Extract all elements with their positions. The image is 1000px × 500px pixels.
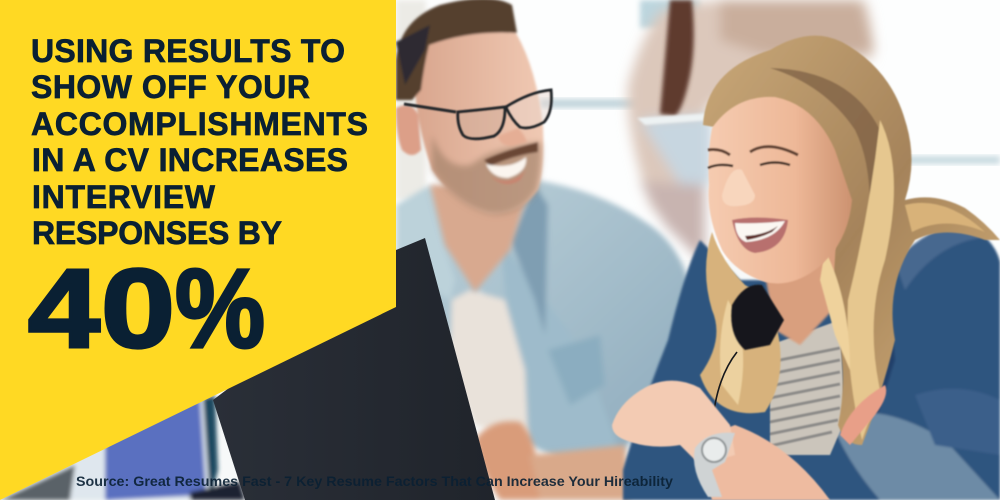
source line: Source: Great Resumes Fast - 7 Key Resume Factors That Can Increase Your Hireability (76, 473, 673, 489)
photo: woman with headset (612, 36, 1000, 500)
yellow panel (0, 0, 396, 500)
woman's face (708, 97, 852, 284)
big statistic: 40%: 4 (28, 246, 100, 371)
headline: SHOW OFF YOUR (31, 69, 310, 105)
headline: USING RESULTS TO (31, 33, 345, 69)
headline: ACCOMPLISHMENTS (31, 106, 368, 142)
man's glasses (404, 90, 551, 139)
big statistic: 40%: % (175, 246, 265, 371)
woman's denim jacket (623, 222, 1000, 500)
wristwatch (694, 433, 735, 497)
woman's hair (700, 36, 1000, 445)
headset and cable (712, 285, 784, 430)
photo: man in denim shirt (396, 0, 693, 460)
man's shirt (396, 180, 693, 460)
headline: IN A CV INCREASES (32, 142, 348, 178)
photo: bottom-left desk blur (0, 395, 245, 500)
photo: blurred colleague in background (628, 0, 875, 265)
photo: open laptop (213, 238, 495, 500)
headline: INTERVIEW (32, 179, 216, 215)
man's neck (430, 185, 530, 292)
braid (660, 0, 694, 116)
woman's striped top (770, 320, 845, 455)
headline (31, 33, 368, 251)
woman's neck (765, 235, 845, 345)
headline: RESPONSES BY (32, 215, 282, 251)
man's head (396, 0, 543, 214)
tablet edge (637, 113, 712, 125)
big statistic: 40%: 0 (101, 246, 175, 371)
woman's arms and hands (612, 381, 886, 500)
photo: man's hand (475, 421, 630, 500)
big statistic: 40% (28, 246, 265, 371)
